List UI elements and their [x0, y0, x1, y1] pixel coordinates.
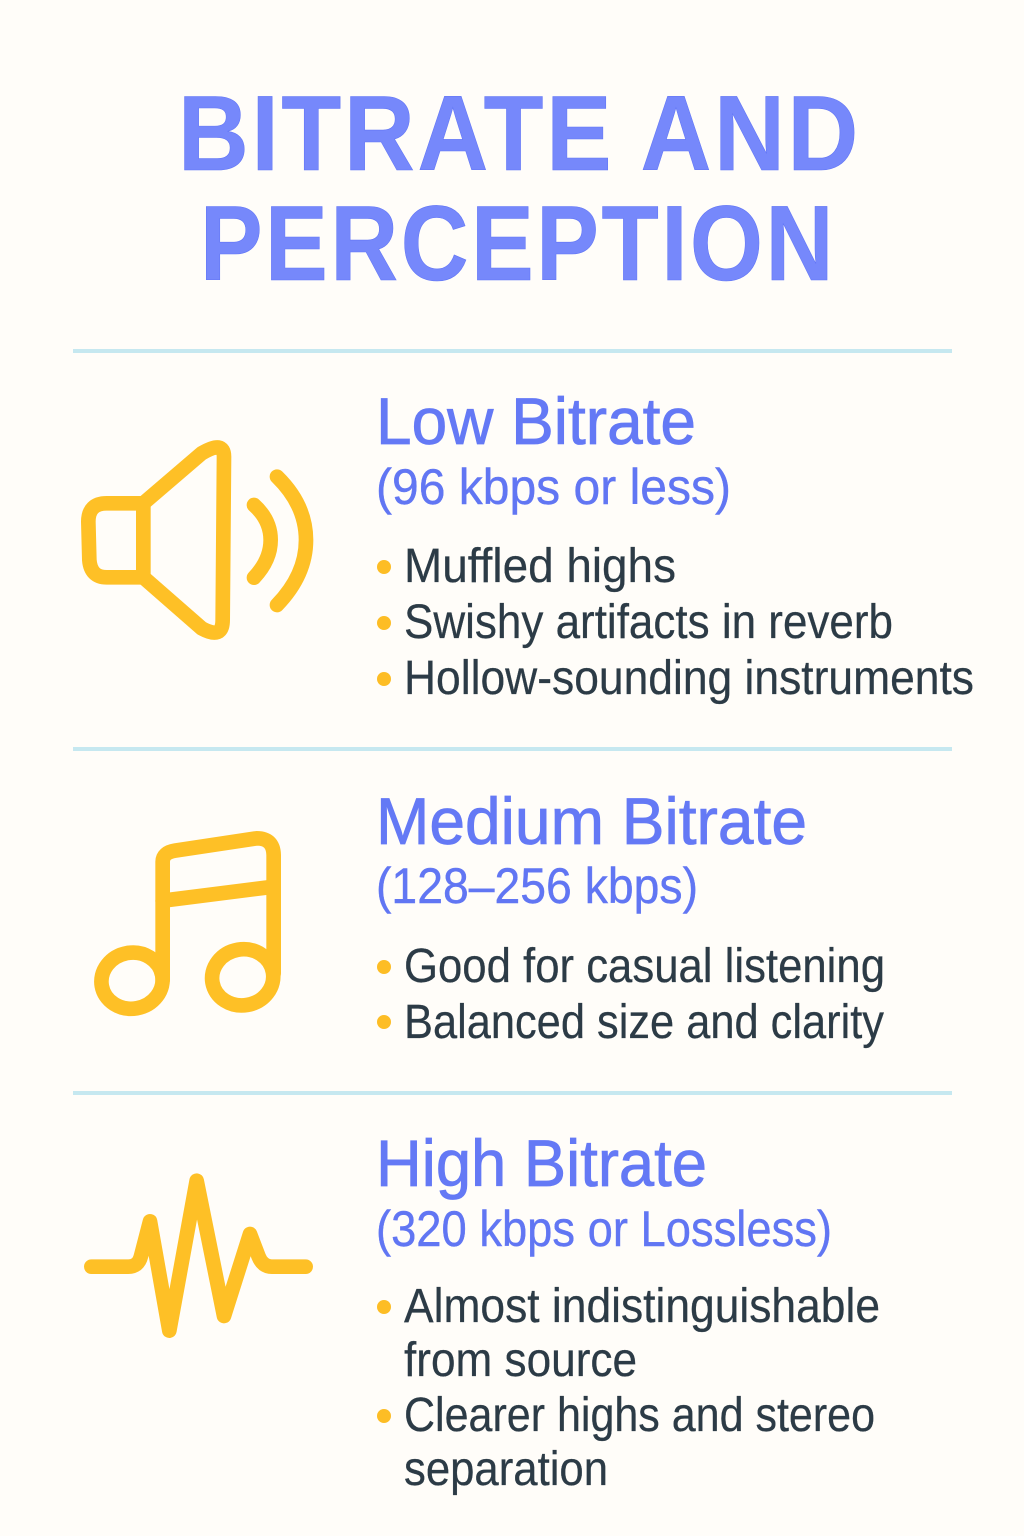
- heading: low bitrate: Low Bitrate: [376, 384, 696, 458]
- bullet list: low bitrate: Swishy artifacts in reverb: [404, 596, 893, 649]
- icon: waveform: [91, 1181, 306, 1331]
- title: [178, 73, 861, 303]
- panel: low bitrate: [88, 384, 974, 705]
- bullet list: medium bitrate: Balanced size and clarity: [404, 996, 884, 1049]
- icon: music note: [97, 838, 278, 1014]
- heading: medium bitrate: Medium Bitrate: [376, 784, 807, 858]
- bullet list: medium bitrate: [377, 940, 885, 1049]
- subheading: medium bitrate range: (128–256 kbps): [376, 858, 698, 914]
- bullet list: high bitrate: from source: [404, 1334, 637, 1387]
- bullet list: high bitrate: separation: [404, 1443, 608, 1496]
- title: PERCEPTION: [200, 183, 836, 303]
- subheading: low bitrate range: (96 kbps or less): [376, 459, 731, 515]
- icon: speaker: [88, 447, 306, 633]
- bullet list: low bitrate: [377, 540, 974, 705]
- panel: medium bitrate: [97, 784, 885, 1049]
- bullet list: high bitrate: Clearer highs and stereo: [404, 1389, 875, 1442]
- subheading: high bitrate range: (320 kbps or Lossless): [376, 1201, 832, 1257]
- bullet list: low bitrate: Hollow-sounding instruments: [404, 652, 974, 705]
- heading: high bitrate: High Bitrate: [376, 1126, 707, 1200]
- bullet list: low bitrate: Muffled highs: [404, 540, 676, 593]
- panel: high bitrate: [91, 1126, 880, 1496]
- bullet list: medium bitrate: Good for casual listening: [404, 940, 885, 993]
- title: BITRATE AND: [178, 73, 861, 193]
- bullet list: high bitrate: Almost indistinguishable: [404, 1280, 880, 1333]
- bullet list: high bitrate: [377, 1280, 880, 1496]
